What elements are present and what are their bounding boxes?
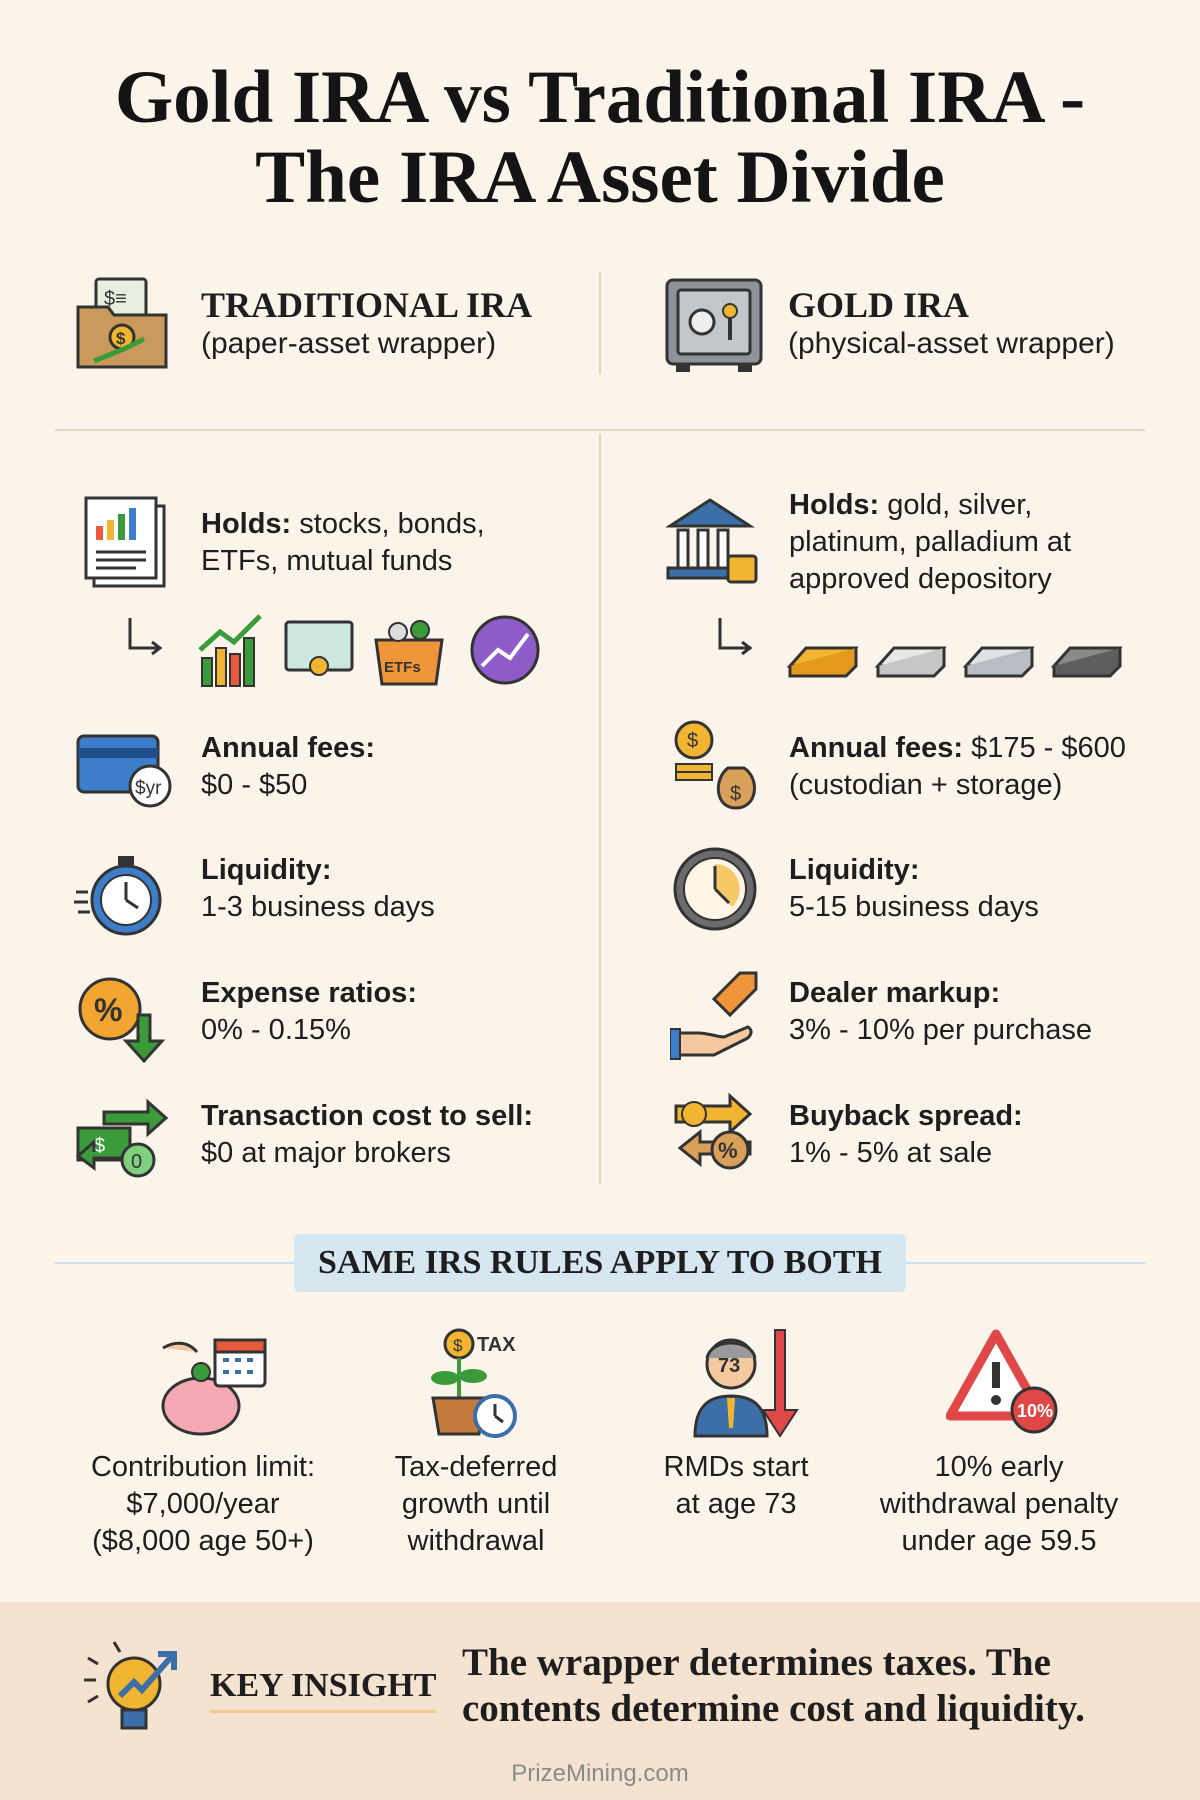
text: annual fees: (custodian + storage) bbox=[789, 769, 1062, 801]
icon: exchange arrows bbox=[674, 1092, 752, 1170]
text: holds: approved depository bbox=[789, 563, 1052, 595]
text: liquidity: 5-15 business days bbox=[789, 891, 1039, 923]
icon: percent down: % bbox=[94, 992, 122, 1028]
footer: source: PrizeMining.com bbox=[511, 1760, 689, 1787]
rule: early withdrawal bbox=[854, 1320, 1144, 1560]
panel: gold IRA rows bbox=[666, 489, 1126, 1170]
heading: gold IRA bbox=[788, 285, 1115, 360]
icon: safe bbox=[666, 278, 762, 372]
text: expense ratios bbox=[201, 977, 417, 1046]
text: key insight: The wrapper determines taxes. The bbox=[462, 1641, 1051, 1684]
panel: key insight bbox=[0, 1602, 1200, 1800]
icon: card: $yr bbox=[135, 778, 162, 799]
heading: traditional IRA bbox=[201, 285, 532, 360]
text: dealer markup: 3% - 10% per purchase bbox=[789, 1014, 1092, 1046]
text: liquidity bbox=[201, 854, 435, 923]
text: RMDs bbox=[591, 1449, 881, 1523]
row: annual fees bbox=[76, 732, 375, 808]
icon: hand with tag bbox=[670, 972, 758, 1060]
panel: traditional IRA rows bbox=[74, 496, 540, 1178]
icon: plant with clock bbox=[419, 1326, 539, 1438]
row: expense ratios bbox=[78, 977, 417, 1063]
icon: card bbox=[76, 734, 172, 808]
icon: money arrows: 0 bbox=[131, 1151, 142, 1173]
icon: coins and bag: $ bbox=[730, 783, 741, 805]
icon: money arrows bbox=[76, 1098, 168, 1178]
text: early withdrawal bbox=[854, 1449, 1144, 1560]
icon: man with arrow bbox=[691, 1326, 801, 1438]
text: holds: Holds: gold, silver, bbox=[789, 489, 1032, 521]
text: contribution limit: $7,000/year bbox=[126, 1488, 280, 1520]
text: tax deferred: growth until bbox=[402, 1488, 550, 1520]
text: buyback spread: 1% - 5% at sale bbox=[789, 1137, 992, 1169]
text: transaction cost: $0 at major brokers bbox=[201, 1137, 451, 1169]
heading: gold IRA: (physical-asset wrapper) bbox=[788, 327, 1115, 360]
text: contribution limit bbox=[58, 1449, 348, 1560]
panel: shared rules bbox=[50, 1320, 1150, 1570]
sub-icons: bars bbox=[718, 618, 1122, 678]
heading: gold IRA: GOLD IRA bbox=[788, 285, 969, 325]
icon: percent down bbox=[78, 978, 166, 1063]
text: early withdrawal: withdrawal penalty bbox=[880, 1488, 1118, 1520]
text: dealer markup bbox=[789, 977, 1092, 1046]
heading: key insight: KEY INSIGHT bbox=[210, 1667, 436, 1704]
text: holds: Holds: stocks, bonds, bbox=[201, 508, 485, 540]
banner line bbox=[55, 1262, 1145, 1264]
text: expense ratios: 0% - 0.15% bbox=[201, 1014, 351, 1046]
icon: plant with clock: $ bbox=[453, 1336, 463, 1355]
icon: stopwatch bbox=[74, 856, 162, 936]
header: traditional IRA bbox=[76, 278, 532, 368]
icon: folder with money: $≡ bbox=[104, 288, 127, 310]
text: liquidity: Liquidity: bbox=[201, 854, 331, 886]
sub-icons: paper assets: ETFs bbox=[384, 659, 421, 676]
text: early withdrawal: 10% early bbox=[935, 1451, 1063, 1483]
text: annual fees bbox=[789, 732, 1126, 801]
icon: folder with money: $ bbox=[116, 329, 126, 348]
icon: warning bbox=[946, 1328, 1066, 1438]
text: tax deferred: Tax-deferred bbox=[395, 1451, 557, 1483]
icon: coins and bag: $ bbox=[687, 730, 698, 752]
icon: report bbox=[84, 496, 166, 588]
text: key insight: contents determine cost and liquidity. bbox=[462, 1687, 1085, 1730]
text: contribution limit: ($8,000 age 50+) bbox=[92, 1525, 314, 1557]
text: liquidity bbox=[789, 854, 1039, 923]
row: liquidity bbox=[74, 854, 435, 936]
row: dealer markup bbox=[670, 972, 1092, 1060]
rule: contribution limit bbox=[58, 1320, 348, 1560]
icon: plant with clock: TAX bbox=[477, 1334, 516, 1356]
text: dealer markup: Dealer markup: bbox=[789, 977, 1000, 1009]
text: holds bbox=[201, 508, 485, 577]
title bbox=[115, 56, 1085, 219]
icon: exchange arrows: % bbox=[718, 1138, 738, 1163]
text: RMDs: at age 73 bbox=[676, 1488, 796, 1520]
icon: folder with money bbox=[76, 278, 168, 368]
title: Gold IRA vs Traditional IRA - bbox=[115, 56, 1085, 139]
icon: money arrows: $ bbox=[94, 1135, 105, 1157]
title: The IRA Asset Divide bbox=[255, 136, 945, 219]
text: liquidity: 1-3 business days bbox=[201, 891, 435, 923]
banner: same IRS rules: SAME IRS RULES APPLY TO BOTH bbox=[318, 1244, 882, 1281]
row: annual fees bbox=[674, 720, 1126, 810]
text: early withdrawal: under age 59.5 bbox=[901, 1525, 1097, 1557]
icon: piggy bank bbox=[153, 1328, 273, 1438]
text: annual fees: Annual fees: bbox=[201, 732, 375, 764]
text: tax deferred: withdrawal bbox=[408, 1525, 544, 1557]
text: annual fees: $0 - $50 bbox=[201, 769, 307, 801]
text: buyback spread bbox=[789, 1098, 1023, 1172]
rule: tax deferred bbox=[331, 1320, 621, 1560]
text: key insight bbox=[462, 1640, 1085, 1732]
icon: bank with lock bbox=[666, 498, 758, 584]
text: contribution limit: Contribution limit: bbox=[91, 1451, 315, 1483]
divider lines bbox=[599, 272, 601, 374]
icon: clock bbox=[674, 848, 756, 930]
row: buyback spread bbox=[674, 1092, 1023, 1170]
text: transaction cost: Transaction cost to sell: bbox=[201, 1100, 533, 1132]
text: tax deferred bbox=[331, 1449, 621, 1560]
text: buyback spread: Buyback spread: bbox=[789, 1100, 1023, 1132]
header: gold IRA bbox=[666, 278, 1115, 372]
icon: coins and bag bbox=[674, 720, 756, 810]
row: transaction cost bbox=[76, 1098, 533, 1178]
heading: traditional IRA: (paper-asset wrapper) bbox=[201, 327, 496, 360]
text: holds: ETFs, mutual funds bbox=[201, 545, 452, 577]
text: annual fees: Annual fees: $175 - $600 bbox=[789, 732, 1126, 764]
row: holds bbox=[84, 496, 540, 687]
row: holds bbox=[666, 489, 1122, 678]
rule: RMDs bbox=[591, 1320, 881, 1560]
text: RMDs: RMDs start bbox=[664, 1451, 808, 1483]
text: holds: platinum, palladium at bbox=[789, 526, 1071, 558]
icon: warning: 10% bbox=[1017, 1401, 1053, 1421]
text: liquidity: Liquidity: bbox=[789, 854, 919, 886]
banner: same IRS rules bbox=[294, 1234, 906, 1292]
heading: traditional IRA: TRADITIONAL IRA bbox=[201, 285, 532, 325]
text: holds bbox=[789, 489, 1071, 595]
icon: lightbulb bbox=[84, 1638, 184, 1738]
text: transaction cost bbox=[201, 1100, 533, 1169]
text: expense ratios: Expense ratios: bbox=[201, 977, 417, 1009]
row: liquidity bbox=[674, 848, 1039, 930]
sub-icons: paper assets bbox=[128, 614, 540, 687]
text: annual fees bbox=[201, 732, 375, 801]
icon: man with arrow: 73 bbox=[718, 1355, 740, 1377]
